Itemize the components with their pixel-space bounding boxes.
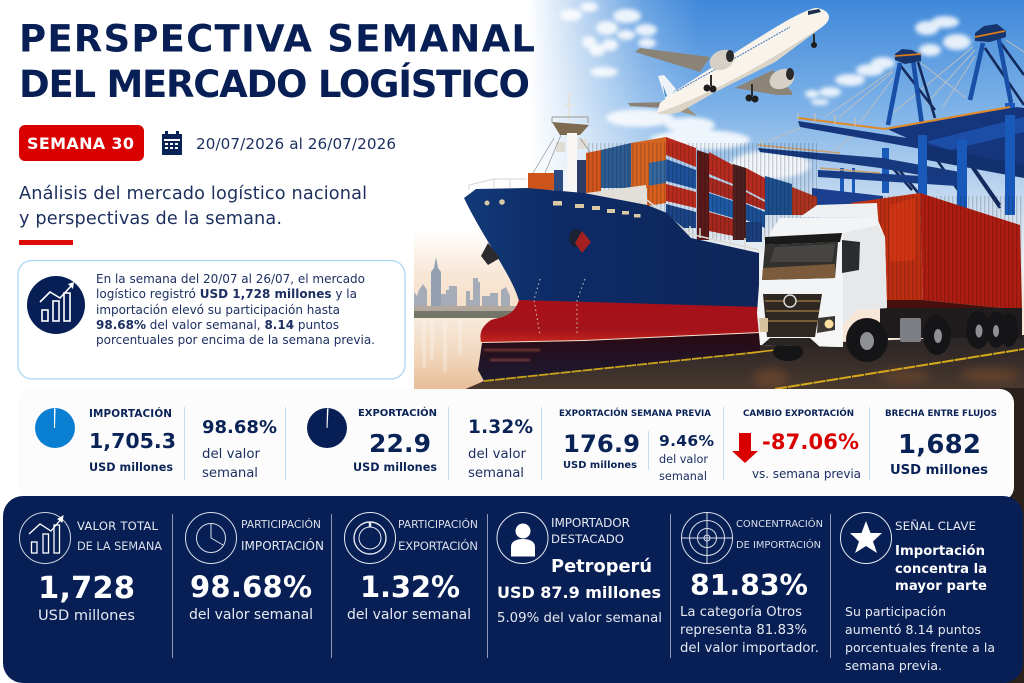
red accent bar [19, 240, 73, 245]
metric: importador destacado: DESTACADO [551, 532, 624, 546]
metric: valor total: 1,728 [38, 571, 135, 606]
KPI: importación [35, 407, 277, 481]
icon: calendar [162, 131, 182, 155]
clouds [560, 2, 971, 179]
red truck container [850, 193, 1022, 320]
water [414, 318, 697, 389]
metric: concentración de importación [680, 512, 823, 656]
metric: señal clave: porcentuales frente a la [845, 640, 995, 655]
metric: participación importación [186, 512, 324, 623]
KPI: exportación: del valor [468, 447, 527, 462]
KPI: brecha entre flujos: 1,682 [898, 430, 981, 460]
metric: participación exportación [344, 512, 478, 623]
ship red bottom [480, 300, 760, 342]
icon: import pie [35, 408, 75, 448]
dark dock behind panels [1000, 388, 1024, 683]
metric: señal clave: Su participación [845, 604, 946, 619]
tail planes [628, 102, 662, 108]
cargo ship containers [528, 137, 817, 242]
KPI: importación: IMPORTACIÓN [89, 407, 172, 420]
summary text: logístico registró USD 1,728 millones y la [96, 287, 357, 301]
metric: importador destacado [497, 512, 662, 626]
KPI: cambio exportación: vs. semana previa [752, 467, 861, 481]
week badge [19, 125, 144, 161]
KPI: brecha entre flujos [885, 409, 997, 478]
KPI: exportación semana previa: EXPORTACIÓN SEMANA PREVIA [559, 407, 711, 419]
metric: señal clave: aumentó 8.14 puntos [845, 622, 981, 637]
KPI: brecha entre flujos: USD millones [890, 463, 988, 478]
metric: concentración de importación: del valor importador. [680, 641, 819, 656]
KPI: exportación semana previa: USD millones [563, 460, 637, 471]
crane dark braces [890, 42, 1024, 208]
metric: concentración de importación: La categoría Otros [680, 604, 802, 620]
ship hull [464, 188, 759, 308]
metric: señal clave: mayor parte [895, 579, 987, 594]
KPI: exportación: 1.32% [468, 417, 533, 438]
KPI: exportación semana previa: del valor [659, 453, 708, 466]
white KPI strip [18, 389, 1014, 501]
metric: concentración de importación: representa 81.83% [680, 623, 807, 638]
date range: 20/07/2026 al 26/07/2026 [196, 135, 396, 153]
summary text: En la semana del 20/07 al 26/07, el mercado [96, 272, 365, 286]
callout: weekly summary [18, 260, 405, 379]
navy metrics panel [3, 496, 1023, 683]
metric: participación importación: IMPORTACIÓN [241, 538, 324, 553]
KPI: brecha entre flujos: BRECHA ENTRE FLUJOS [885, 409, 997, 419]
landing gear [711, 34, 814, 96]
near wing [735, 70, 792, 95]
far wing [635, 48, 710, 72]
week badge: SEMANA 30 [27, 134, 134, 153]
anchor and hawse [481, 229, 591, 335]
KPI: exportación semana previa: semanal [659, 470, 707, 483]
truck cab [757, 203, 887, 347]
ship bow rail [469, 179, 527, 190]
icon: bars with arrow [20, 512, 70, 564]
summary text [96, 272, 375, 347]
KPI: cambio exportación: CAMBIO EXPORTACIÓN [743, 407, 854, 419]
KPI: cambio exportación: -87.06% [762, 430, 859, 454]
metric: valor total: DE LA SEMANA [77, 540, 162, 553]
KPI: importación: 1,705.3 [89, 429, 176, 453]
KPI: exportación semana previa [559, 407, 714, 483]
deck house [586, 185, 646, 205]
icon: ring [344, 512, 396, 564]
subtitle: y perspectivas de la semana. [19, 209, 282, 229]
icon: red down arrow [732, 433, 758, 463]
KPI: exportación semana previa: 176.9 [563, 429, 640, 458]
metric: importador destacado: 5.09% del valor semanal [497, 611, 662, 626]
city skyline [414, 257, 510, 310]
icon: growth chart circle [27, 276, 85, 334]
truck chassis and wheels [773, 308, 1022, 362]
crane girders [798, 107, 1024, 168]
metric: importador destacado: Petroperú [551, 556, 652, 577]
metric: señal clave: semana previa. [845, 658, 942, 673]
crane columns [840, 103, 1015, 193]
title: PERSPECTIVA SEMANAL [19, 18, 535, 60]
summary text: porcentuales por encima de la semana previa. [96, 333, 375, 347]
metric: valor total [20, 512, 162, 624]
metric: señal clave: SEÑAL CLAVE [895, 518, 976, 533]
KPI: importación: semanal [202, 466, 258, 481]
summary text: importación elevó su participación hasta [96, 303, 340, 317]
metric: participación exportación: PARTICIPACIÓN [398, 518, 478, 531]
metric: concentración de importación: 81.83% [690, 569, 808, 602]
subtitle: Análisis del mercado logístico nacional [19, 184, 367, 204]
KPI: exportación: EXPORTACIÓN [358, 406, 437, 419]
KPI: importación: USD millones [89, 461, 173, 474]
metric: concentración de importación: DE IMPORTACIÓN [736, 538, 821, 551]
title [19, 18, 535, 106]
cranes [758, 24, 1024, 215]
metric: participación exportación: del valor semanal [347, 607, 471, 623]
metric: valor total: VALOR TOTAL [77, 519, 159, 533]
KPI: exportación [307, 406, 533, 481]
title: DEL MERCADO LOGÍSTICO [19, 62, 530, 106]
summary text: 98.68% del valor semanal, 8.14 puntos [96, 318, 339, 332]
fuselage [657, 8, 829, 114]
icon: export pie [307, 408, 347, 448]
airplane [628, 8, 829, 116]
metric: participación exportación: EXPORTACIÓN [398, 538, 478, 553]
metric: participación importación: PARTICIPACIÓN [241, 518, 321, 531]
icon: clock pie [186, 512, 236, 564]
hero photo: ship, plane, cranes and truck [414, 0, 1024, 400]
KPI: cambio exportación [732, 407, 861, 481]
reflection on water [478, 333, 760, 381]
KPI: importación: del valor [202, 447, 261, 462]
crane cables [768, 40, 1024, 150]
metric: valor total: USD millones [38, 607, 135, 624]
KPI: exportación: semanal [468, 466, 524, 481]
metric: concentración de importación: CONCENTRACIÓN [736, 517, 823, 530]
KPI: importación: 98.68% [202, 417, 277, 438]
ship superstructure [533, 94, 590, 193]
KPI: exportación: 22.9 [369, 429, 431, 458]
KPI: exportación semana previa: 9.46% [659, 432, 714, 450]
icon: target [682, 512, 732, 564]
metric: participación importación: 98.68% [190, 570, 312, 604]
subtitle [19, 184, 367, 229]
metric: señal clave: Importación [895, 543, 985, 559]
icon: star [840, 512, 892, 564]
metric: señal clave [840, 512, 995, 673]
metric: participación exportación: 1.32% [360, 570, 460, 604]
metric: importador destacado: USD 87.9 millones [497, 583, 661, 602]
icon: person [497, 512, 548, 564]
KPI: exportación: USD millones [353, 461, 437, 474]
metric: participación importación: del valor semanal [189, 607, 313, 623]
crane blue legs [888, 35, 1011, 125]
metric: importador destacado: IMPORTADOR [551, 516, 630, 530]
dock ground [466, 335, 1024, 389]
metric: señal clave: concentra la [895, 562, 987, 577]
engines [710, 50, 734, 70]
tail fin [658, 75, 676, 101]
